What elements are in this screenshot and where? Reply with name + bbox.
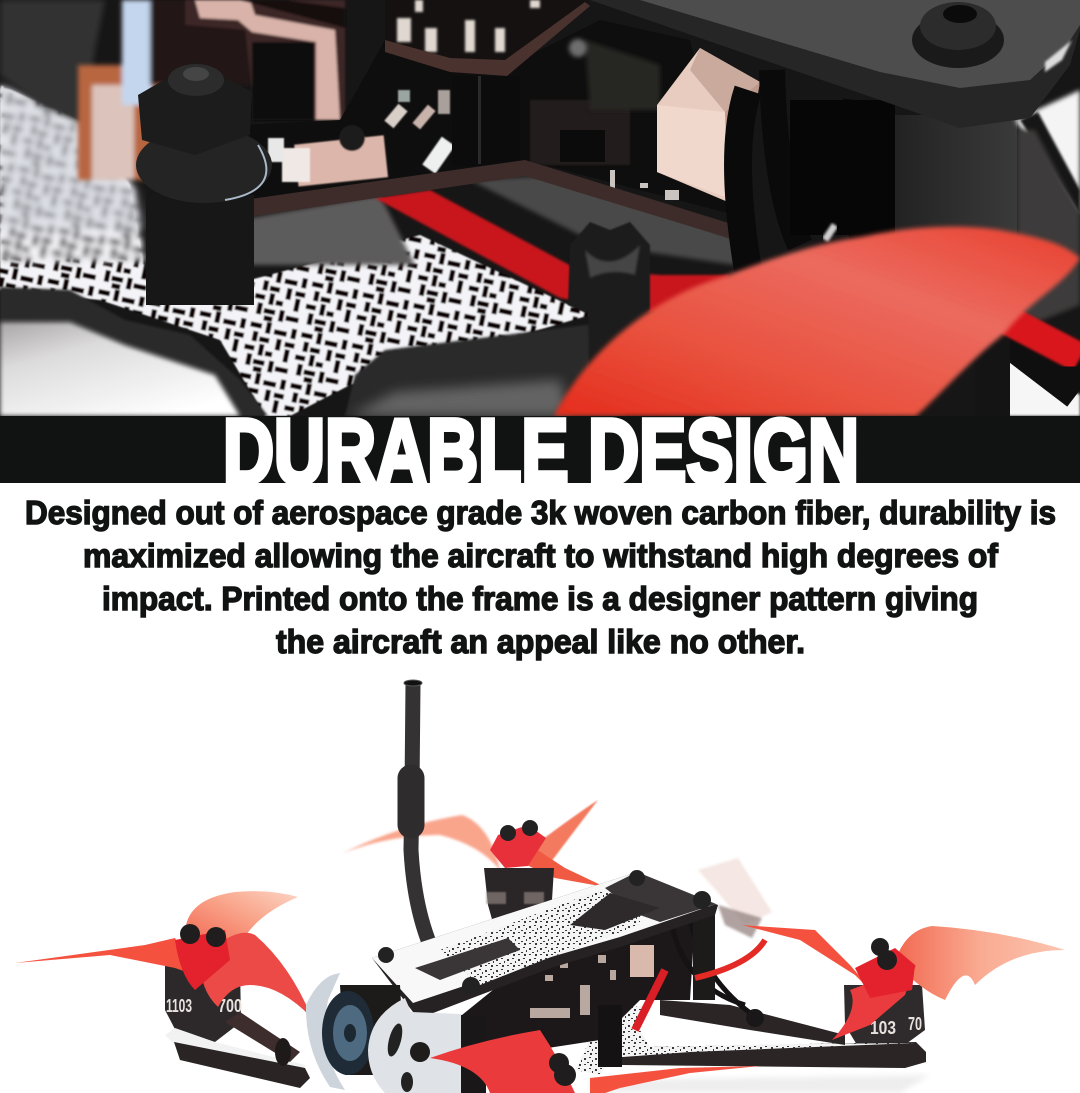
top carbon plate: [590, 0, 1080, 128]
description text block: the aircraft an appeal like no other.: [276, 623, 805, 660]
rear motor: [484, 868, 554, 919]
USB-C connector: [185, 0, 345, 120]
speckled carbon frame: [0, 85, 590, 416]
description text block: Designed out of aerospace grade 3k woven carbon fiber, durability is: [25, 494, 1056, 531]
upper board with pins: [385, 0, 590, 166]
description text block: impact. Printed onto the frame is a designer pattern giving: [102, 580, 978, 617]
cable tie: [567, 222, 651, 362]
PCB edge: [222, 160, 735, 240]
red wire, right: [1000, 316, 1080, 358]
carbon frame edges: [0, 287, 640, 416]
black wires: [738, 70, 895, 270]
right motor and arm: 103: [870, 1018, 896, 1038]
wire and copper pad, top left: [78, 0, 250, 180]
top plate with speckled print: [372, 870, 718, 1018]
left motor and arm: [165, 965, 310, 1088]
rear propeller: [343, 800, 605, 887]
photo: close-up of drone frame and electronics: [0, 0, 1080, 416]
red wire: [375, 190, 730, 312]
red propeller blade, blurred: [554, 227, 1080, 416]
grey undersides: [250, 175, 735, 265]
bottom frame arm: [570, 1000, 926, 1075]
description text block: maximized allowing the aircraft to withstand high degrees of: [83, 537, 999, 574]
left propeller: [15, 891, 312, 1018]
description text block: [25, 494, 1056, 660]
right motor and arm: 70: [908, 1014, 922, 1034]
blurred dark corner: [0, 0, 105, 125]
carbon post: [895, 115, 1017, 234]
bolt on top plate: [912, 2, 1004, 68]
VTX antenna connector: [698, 858, 772, 938]
left motor and arm: 700: [218, 996, 242, 1016]
black nylon standoff: [136, 62, 272, 305]
camera with lens and front plates: [306, 973, 486, 1093]
title band: [0, 416, 1080, 483]
right motor and arm: [844, 985, 925, 1044]
white background, right side: [1010, 88, 1080, 416]
left motor and arm: 1103: [166, 996, 192, 1016]
connector: pink JST plug: [657, 48, 760, 205]
ground shadow: [590, 1075, 930, 1093]
front propeller: [430, 1030, 760, 1093]
antenna: [404, 680, 430, 945]
right propeller: [742, 925, 1065, 1040]
wires and electronics under plate: [462, 905, 765, 1067]
main PCB with components: [258, 20, 722, 212]
title: DURABLE DESIGN: [223, 401, 859, 503]
photo: full drone on white: [15, 680, 1065, 1093]
white background, lower left: [0, 322, 240, 416]
